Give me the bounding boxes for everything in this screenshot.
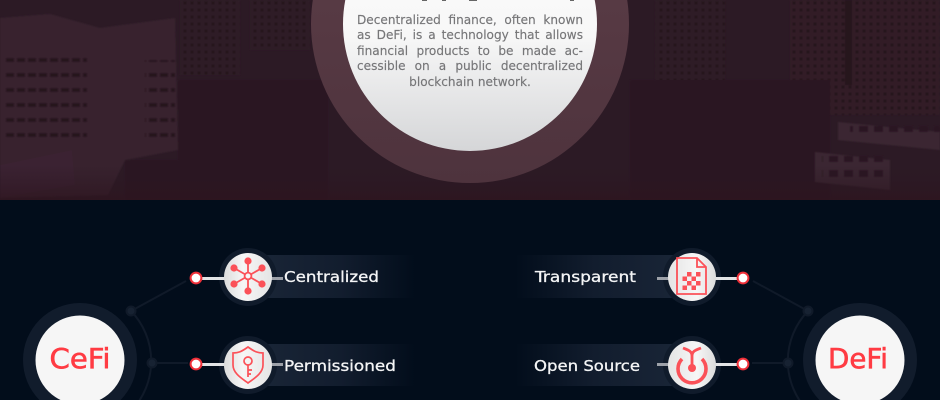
- text block: DeFi description: as DeFi, is a technology that allows: [357, 28, 583, 42]
- item: Transparent: [515, 248, 748, 306]
- item: Transparent: Transparent: [534, 268, 636, 286]
- text block: DeFi description: Decentralized finance, often known: [357, 12, 583, 26]
- text block: DeFi description: [357, 12, 583, 88]
- central white disc: [343, 0, 597, 151]
- CeFi node: [23, 303, 137, 400]
- CeFi node: CeFi: [50, 342, 110, 375]
- DeFi node: DeFi: [828, 342, 888, 375]
- item: Open Source: [515, 336, 748, 394]
- item: Open Source: Open Source: [534, 357, 640, 375]
- text block: DeFi description: cessible on a public decentralized: [357, 59, 583, 73]
- item: Permissioned: Permissioned: [284, 357, 396, 375]
- item: Permissioned: [191, 336, 415, 394]
- item: Centralized: Centralized: [284, 268, 379, 286]
- item: Centralized: [191, 248, 415, 306]
- central ring: [311, 0, 629, 183]
- clipped title descenders: [422, 0, 574, 1]
- CeFi connector network: [126, 281, 188, 400]
- DeFi node: [803, 303, 917, 400]
- panel: dark lower section: [0, 200, 940, 400]
- text block: DeFi description: financial products to be made ac-: [357, 44, 583, 58]
- text block: DeFi description: blockchain network.: [409, 74, 531, 88]
- DeFi connector network: [752, 281, 812, 400]
- panel: city photo background: [0, 0, 940, 200]
